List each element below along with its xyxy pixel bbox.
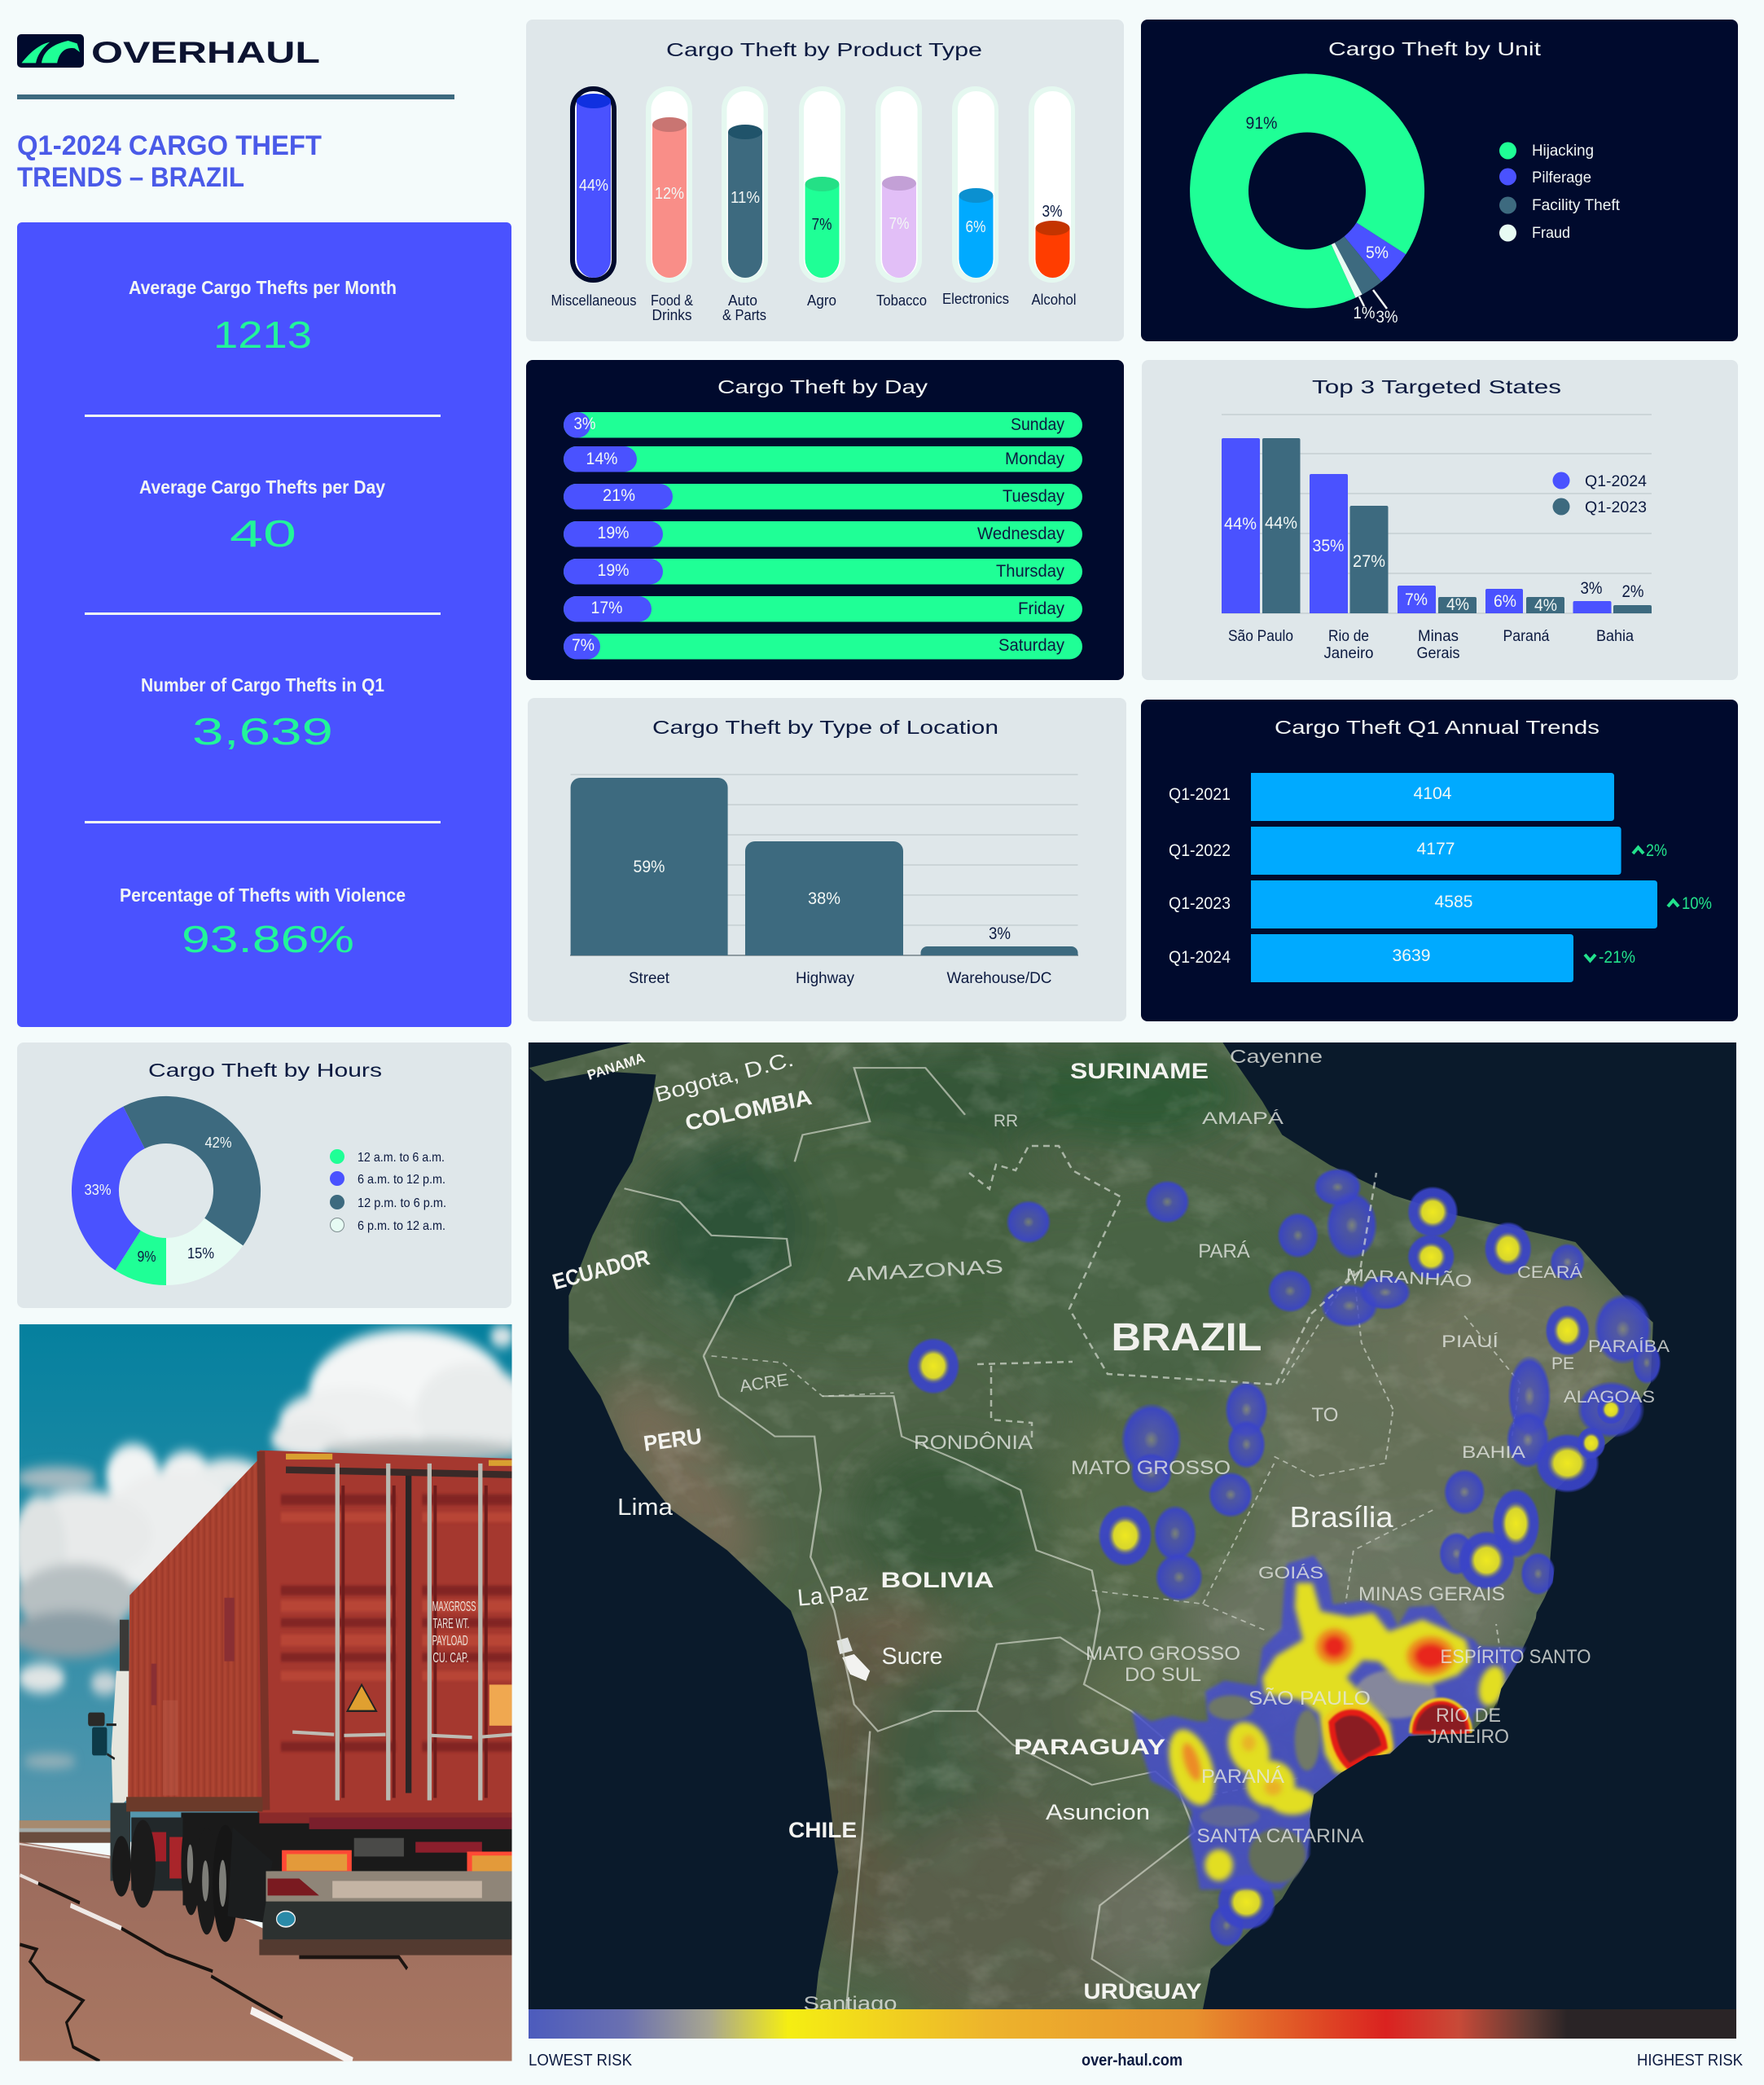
map labels: SURINAME	[1070, 1059, 1209, 1083]
state labels: Minas	[1418, 628, 1459, 645]
tube: food and drinks	[646, 86, 692, 283]
southeast hot zone	[1132, 1547, 1607, 1900]
map labels: URUGUAY	[1083, 1979, 1202, 2004]
map labels: ECUADOR	[550, 1245, 652, 1294]
location labels	[629, 970, 1052, 987]
container data plate text: TARE WT.	[432, 1616, 469, 1632]
stat: number in Q1	[141, 674, 384, 753]
state labels	[1228, 628, 1634, 662]
tube: miscellaneous: 44%	[579, 177, 608, 195]
bar chart: states: 6%	[1494, 592, 1516, 611]
bar chart: states: 2%	[1622, 582, 1643, 601]
map labels: CHILE	[788, 1818, 857, 1842]
bar: Wednesday	[564, 521, 1082, 547]
bar: Saturday: Saturday	[998, 636, 1064, 655]
map labels: Lima	[617, 1495, 674, 1521]
tube: tobacco	[875, 86, 922, 283]
row: Q1-2021	[1169, 773, 1614, 821]
bar chart: location: 59%	[634, 858, 665, 876]
tube: electronics: 6%	[966, 218, 986, 236]
road	[20, 1820, 111, 1842]
legend: hours: 12 p.m. to 6 p.m.	[358, 1196, 446, 1210]
map labels: GOIÁS	[1258, 1564, 1323, 1582]
donut chart: unit: 5%	[1366, 244, 1389, 262]
row: Q1-2024	[1169, 934, 1635, 982]
row: Q1-2023	[1169, 880, 1712, 928]
row: Q1-2024: -21%	[1599, 948, 1635, 967]
state labels: Bahia	[1596, 628, 1634, 645]
location labels: Warehouse/DC	[946, 970, 1052, 987]
map labels: CEARÁ	[1517, 1263, 1582, 1282]
bar chart: states: 44%	[1265, 514, 1297, 533]
bar: Friday: 17%	[591, 599, 622, 617]
stat: percentage with violence	[120, 884, 406, 960]
land	[529, 1042, 1653, 2009]
map labels: MINAS GERAIS	[1358, 1583, 1505, 1605]
bar chart: states: 27%	[1353, 552, 1385, 571]
tube: auto and parts	[722, 86, 768, 283]
footer labels: HIGHEST RISK	[1637, 2052, 1744, 2070]
heat blobs: low risk	[1007, 1169, 1661, 1947]
container data plate text	[432, 1601, 476, 1662]
bar chart: location: 38%	[808, 889, 840, 908]
title: Q1-2024 CARGO THEFT	[17, 130, 322, 161]
map labels: Bogota, D.C.	[652, 1047, 796, 1107]
legend: unit: Facility Theft	[1532, 197, 1621, 214]
map labels: BRAZIL	[1111, 1316, 1262, 1359]
row: Q1-2024: Q1-2024	[1169, 948, 1231, 967]
legend: unit: Pilferage	[1532, 169, 1591, 187]
panel: cargo theft by unit	[1141, 20, 1738, 341]
state labels: Paraná	[1503, 628, 1550, 645]
map labels: La Paz	[796, 1579, 870, 1612]
map labels: PIAUÍ	[1441, 1332, 1499, 1351]
stat: average per day: 40	[230, 512, 296, 555]
stat: number in Q1: 3,639	[192, 710, 333, 753]
tube: tobacco: 7%	[889, 215, 910, 233]
heading: location: Cargo Theft by Type of Location	[652, 717, 998, 738]
bar: Wednesday: 19%	[598, 524, 629, 542]
legend: hours: 6 a.m. to 12 p.m.	[358, 1173, 445, 1187]
heading: product type: Cargo Theft by Product Type	[666, 39, 982, 60]
map labels: PERU	[642, 1424, 704, 1456]
legend: unit	[1499, 142, 1621, 242]
donut chart: hours: 9%	[137, 1249, 156, 1265]
header rule	[17, 94, 454, 99]
panel: cargo theft Q1 annual trends	[1141, 700, 1738, 1021]
map labels: SÃO PAULO	[1248, 1688, 1371, 1710]
map labels: MARANHÃO	[1345, 1265, 1472, 1291]
map labels: RIO DE	[1436, 1705, 1501, 1727]
heading: unit: Cargo Theft by Unit	[1328, 38, 1542, 59]
legend: states: Q1-2023	[1585, 499, 1647, 516]
borders	[625, 1068, 1195, 2009]
map labels: PARAÍBA	[1588, 1337, 1670, 1356]
bar: Friday	[564, 596, 1082, 622]
stat: percentage with violence: Percentage of Thefts with Violence	[120, 884, 406, 906]
bar: Tuesday: 21%	[603, 486, 635, 505]
donut chart: hours: 15%	[187, 1245, 214, 1262]
panel: cargo theft by product type	[526, 20, 1124, 341]
footer labels	[529, 2052, 1744, 2070]
row: Q1-2021: 4104	[1414, 784, 1452, 803]
map labels: RR	[994, 1112, 1018, 1130]
stat: average per month: Average Cargo Thefts per Month	[129, 277, 397, 298]
door bands	[281, 1495, 512, 1752]
donut chart: unit: 1%	[1354, 304, 1375, 323]
bar: Monday: Monday	[1005, 450, 1064, 468]
legend: states: Q1-2024	[1585, 473, 1647, 490]
logo: Overhaul: OVERHAUL	[91, 36, 320, 69]
bar chart: location	[571, 778, 1078, 955]
map labels: PANAMA	[586, 1050, 647, 1083]
map labels: ACRE	[739, 1371, 790, 1396]
map labels	[550, 1046, 1670, 2015]
container data plate text: CU. CAP.	[432, 1650, 469, 1666]
map labels: MATO GROSSO	[1071, 1457, 1231, 1479]
bar: Thursday	[564, 559, 1082, 585]
tube: agro	[799, 86, 845, 283]
panel: key stats	[17, 222, 511, 1027]
bar chart: states: 3%	[1580, 579, 1603, 598]
map labels: Santiago	[803, 1993, 897, 2015]
bar: Wednesday: Wednesday	[977, 525, 1064, 543]
map: Brazil cargo theft heat map	[521, 1034, 1742, 2033]
bar: Sunday	[564, 412, 1082, 438]
product labels: Food &	[651, 292, 693, 309]
state labels: São Paulo	[1228, 628, 1293, 645]
product labels: Miscellaneous	[551, 292, 637, 309]
bar: Saturday	[564, 634, 1082, 660]
map labels: BAHIA	[1462, 1443, 1525, 1462]
risk colour scale	[529, 2009, 1736, 2039]
stat: average per day: Average Cargo Thefts per Day	[139, 476, 385, 498]
footer labels: LOWEST RISK	[529, 2052, 633, 2070]
map labels: TO	[1312, 1404, 1338, 1426]
map labels: AMAZONAS	[846, 1256, 1004, 1286]
stat: average per month: 1213	[213, 314, 312, 356]
bar: Tuesday: Tuesday	[1003, 487, 1064, 506]
panel: cargo theft by hours	[17, 1042, 511, 1308]
product labels	[551, 291, 1077, 323]
product labels: Tobacco	[876, 292, 927, 309]
map labels: Cayenne	[1230, 1046, 1323, 1067]
product labels: Auto	[728, 292, 757, 309]
container data plate text: MAXGROSS	[432, 1599, 476, 1615]
container	[128, 1459, 264, 1811]
bar: Tuesday	[564, 484, 1082, 510]
state labels: Rio de	[1328, 628, 1369, 645]
tube: alcohol: 3%	[1042, 203, 1063, 221]
legend: hours: 12 a.m. to 6 a.m.	[358, 1151, 445, 1165]
bar: Thursday: Thursday	[996, 562, 1064, 581]
map labels: JANEIRO	[1428, 1726, 1509, 1748]
donut chart: hours	[72, 1096, 261, 1285]
tube: alcohol	[1029, 86, 1075, 283]
legend: hours: 6 p.m. to 12 a.m.	[358, 1219, 445, 1233]
map labels: BOLIVIA	[881, 1568, 994, 1592]
stat: percentage with violence: 93.86%	[182, 918, 354, 960]
row: Q1-2023: Q1-2023	[1169, 894, 1231, 913]
stat: average per day	[139, 476, 385, 555]
map labels: Sucre	[881, 1644, 943, 1670]
donut chart: unit: 3%	[1376, 308, 1398, 327]
bar chart: states	[1222, 438, 1652, 615]
stat: number in Q1: Number of Cargo Thefts in Q1	[141, 674, 384, 696]
tube: electronics	[952, 86, 998, 283]
map labels: Brasília	[1290, 1500, 1394, 1534]
bar: Monday	[564, 446, 1082, 472]
footer labels: over-haul.com	[1082, 2052, 1183, 2070]
donut chart: hours: 33%	[85, 1182, 111, 1198]
bar: Sunday: 3%	[573, 415, 596, 433]
logo: Overhaul	[17, 34, 320, 69]
title	[17, 130, 322, 193]
row: Q1-2022: 4177	[1417, 840, 1455, 858]
legend: hours	[330, 1149, 446, 1233]
product labels: Alcohol	[1031, 292, 1077, 308]
map labels: PARAGUAY	[1014, 1735, 1165, 1759]
row: Q1-2022: 2%	[1646, 841, 1667, 860]
bar chart: location: 3%	[989, 924, 1011, 943]
heading: states: Top 3 Targeted States	[1312, 376, 1561, 397]
row: Q1-2023: 4585	[1435, 893, 1472, 911]
map labels: ESPÍRITO SANTO	[1440, 1646, 1591, 1668]
map labels: SANTA CATARINA	[1197, 1825, 1363, 1847]
bar: Saturday: 7%	[572, 636, 595, 655]
legend: unit: Fraud	[1532, 225, 1570, 242]
donut chart: unit	[1190, 73, 1424, 327]
heading: hours: Cargo Theft by Hours	[148, 1060, 382, 1081]
tractor	[112, 1671, 129, 1813]
state labels: Janeiro	[1324, 645, 1373, 662]
chassis and wheels	[126, 1797, 262, 1811]
map labels: PE	[1551, 1354, 1574, 1373]
legend: unit: Hijacking	[1532, 143, 1594, 160]
map labels: ALAGOAS	[1564, 1388, 1655, 1407]
location labels: Street	[629, 970, 670, 987]
bar: Friday: Friday	[1018, 599, 1064, 618]
panel: cargo theft by day	[526, 360, 1124, 680]
map labels: DO SUL	[1125, 1664, 1201, 1686]
tube: agro: 7%	[811, 216, 832, 234]
map labels: COLOMBIA	[683, 1085, 814, 1135]
heading: trends: Cargo Theft Q1 Annual Trends	[1275, 717, 1599, 738]
legend: states	[1552, 472, 1647, 516]
row: Q1-2023: 10%	[1682, 894, 1712, 913]
bar: Thursday: 19%	[598, 561, 629, 580]
dashed state borders	[969, 1146, 1376, 1439]
tube: food and drinks: 12%	[655, 185, 684, 203]
panel: cargo theft by type of location	[528, 698, 1126, 1021]
bar: Sunday: Sunday	[1011, 415, 1064, 434]
container data plate text: PAYLOAD	[432, 1633, 468, 1649]
row: Q1-2022: Q1-2022	[1169, 841, 1231, 860]
heat blobs: medium risk	[907, 1187, 1626, 1930]
bar chart: states: 4%	[1534, 596, 1557, 615]
location labels: Highway	[796, 970, 854, 987]
row: Q1-2021: Q1-2021	[1169, 785, 1231, 804]
tube: miscellaneous	[570, 86, 617, 283]
bar chart: states: 7%	[1405, 590, 1428, 609]
heading: day: Cargo Theft by Day	[717, 376, 928, 397]
title: TRENDS – BRAZIL	[17, 162, 244, 193]
bar chart: states: 35%	[1313, 537, 1344, 555]
map labels: PARANÁ	[1201, 1766, 1284, 1788]
bar: Monday: 14%	[586, 450, 617, 468]
clouds	[11, 1326, 529, 1768]
bar chart: states: 4%	[1446, 595, 1469, 614]
map labels: PARÁ	[1198, 1240, 1250, 1262]
donut chart: unit: 91%	[1246, 114, 1277, 133]
stat: average per month	[129, 277, 397, 356]
map labels: RONDÔNIA	[914, 1431, 1033, 1454]
row: Q1-2022	[1169, 827, 1667, 875]
tube: auto and parts: 11%	[731, 189, 760, 207]
row: Q1-2024: 3639	[1393, 946, 1430, 965]
photo: container truck on highway	[11, 1324, 529, 2061]
map labels: AMAPÁ	[1202, 1109, 1284, 1128]
product labels: Agro	[807, 292, 836, 309]
state labels: Gerais	[1417, 645, 1459, 662]
panel: top 3 targeted states	[1142, 360, 1738, 680]
bar chart: states: 44%	[1224, 515, 1257, 533]
map labels: Asuncion	[1046, 1800, 1150, 1824]
donut chart: hours: 42%	[205, 1135, 231, 1151]
product labels: Electronics	[942, 291, 1009, 307]
product labels: Drinks	[652, 307, 692, 323]
map labels: MATO GROSSO	[1086, 1643, 1240, 1665]
product labels: & Parts	[722, 307, 766, 323]
